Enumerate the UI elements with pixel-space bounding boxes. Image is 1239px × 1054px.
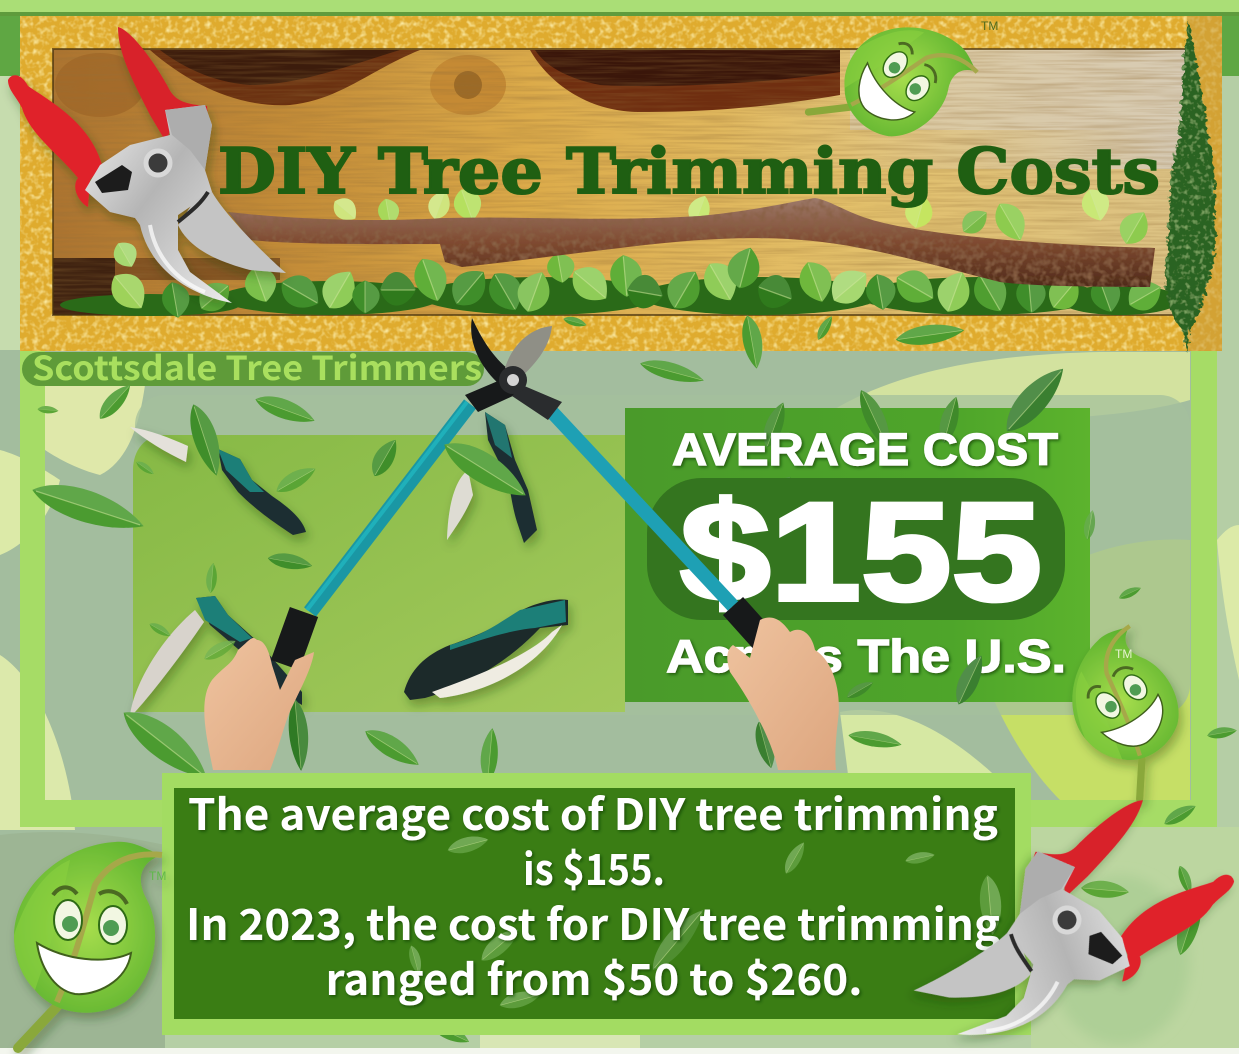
figure: $155: $155 xyxy=(680,473,1042,630)
icon: bow saw xyxy=(130,596,302,715)
panel: translucent rounded area xyxy=(135,395,1190,715)
gold frame xyxy=(20,16,1222,351)
summary line 3: In 2023, the cost for DIY tree trimming xyxy=(186,891,1000,953)
title: DIY Tree Trimming Costs xyxy=(218,134,1160,208)
foliage along header bottom xyxy=(60,184,1180,320)
leaf over lopper xyxy=(437,431,534,507)
icon: cypress tree xyxy=(1165,20,1216,352)
summary line 1: The average cost of DIY tree trimming xyxy=(188,781,998,843)
lower light green frame xyxy=(20,345,1217,827)
price pill xyxy=(647,478,1065,620)
brand label: Scottsdale Tree Trimmers xyxy=(32,342,482,390)
subheading: Across The U.S. xyxy=(666,630,1066,682)
scattered leaves behind lopper xyxy=(28,314,1238,1048)
icon: folded saw xyxy=(404,600,568,700)
icon: lopper xyxy=(285,318,768,665)
icon: right leaf mascot: TM xyxy=(1115,647,1132,661)
icon: hand saw top xyxy=(130,427,306,535)
heading: average cost: AVERAGE COST xyxy=(672,424,1058,475)
faint leaves in summary box xyxy=(406,832,1004,1012)
wood board xyxy=(53,49,1187,315)
inner shadow line xyxy=(53,49,1187,315)
icon: right hand xyxy=(727,617,839,770)
icon: left hand xyxy=(204,638,314,770)
summary line 2: is $155. xyxy=(523,836,665,898)
branch xyxy=(228,198,1155,287)
icon: right leaf mascot xyxy=(1042,619,1219,801)
panel: lime green gradient area xyxy=(133,435,625,712)
background leaves inside box xyxy=(753,386,964,702)
summary line 4: ranged from $50 to $260. xyxy=(326,946,862,1008)
icon: header leaf mascot xyxy=(806,0,998,179)
icon: header leaf mascot: TM xyxy=(981,19,998,33)
top accent band xyxy=(0,0,1239,76)
icon: header pruner xyxy=(8,27,286,303)
panel: average cost box xyxy=(625,386,1090,702)
icon: folding saw centre xyxy=(447,412,537,543)
panel: summary text box xyxy=(162,773,1031,1035)
icon: bottom left leaf mascot xyxy=(14,842,166,1048)
icon: bottom left leaf mascot: TM xyxy=(149,869,166,883)
icon: bottom right pruner xyxy=(905,754,1239,1054)
panel: header wood sign xyxy=(20,16,1222,351)
